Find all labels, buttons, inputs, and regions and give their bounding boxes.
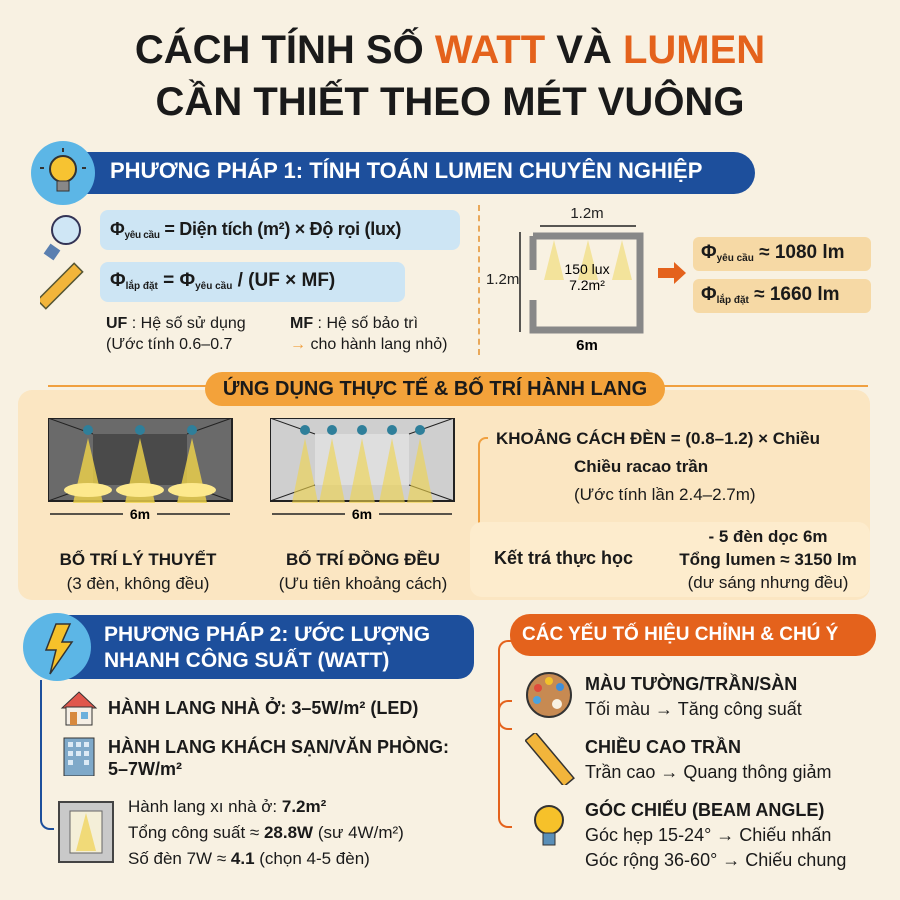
item: wall color: MÀU TƯỜNG/TRẦN/SÀN bbox=[585, 674, 797, 694]
item: beam angle: GÓC CHIẾU (BEAM ANGLE) bbox=[585, 800, 824, 820]
UF note bbox=[106, 315, 246, 353]
title bbox=[135, 27, 765, 124]
diagram: 5 lamps: 6m bbox=[352, 506, 372, 522]
banner: method 2 bbox=[23, 613, 474, 681]
heading pill: ỨNG DỤNG THỰC TẾ & BỐ TRÍ HÀNH LANG bbox=[223, 378, 647, 400]
heading pill bbox=[205, 372, 665, 406]
MF note: → cho hành lang nhỏ) bbox=[290, 336, 447, 353]
diagram: room plan bbox=[486, 205, 644, 354]
banner: method 2: NHANH CÔNG SUẤT (WATT) bbox=[104, 649, 389, 672]
diagram: 5 lamps bbox=[270, 418, 455, 522]
arrow bbox=[658, 262, 686, 284]
title: CÁCH TÍNH SỐ WATT VÀ LUMEN bbox=[135, 28, 765, 72]
formula 2 bbox=[100, 262, 405, 302]
MF note bbox=[290, 315, 447, 353]
item: beam angle: Góc hẹp 15-24° → Chiếu nhấn bbox=[585, 825, 831, 845]
panel: application: (dư sáng nhưng đều) bbox=[688, 573, 848, 592]
result text: Kết trá thực học bbox=[494, 548, 633, 568]
panel: application: Tổng lumen ≈ 3150 lm bbox=[679, 550, 857, 569]
icon: glass bulb bbox=[44, 215, 81, 260]
item: example: Tổng công suất ≈ 28.8W (sư 4W/m²) bbox=[128, 823, 404, 842]
result 1 bbox=[693, 237, 871, 271]
caption 1: (3 đèn, không đều) bbox=[67, 574, 209, 593]
formula 1: Φyêu cầu = Diện tích (m²) × Độ rọi (lux) bbox=[110, 219, 401, 241]
formula 1 bbox=[100, 210, 460, 250]
item: hotel bbox=[64, 736, 449, 779]
MF note: MF : Hệ số bảo trì bbox=[290, 315, 418, 332]
spacing formula: Chiều racao trần bbox=[574, 457, 708, 476]
item: beam angle bbox=[534, 799, 846, 870]
UF note: UF : Hệ số sử dụng bbox=[106, 315, 246, 332]
banner: adjustments: CÁC YẾU TỐ HIỆU CHỈNH & CHÚ Ý bbox=[522, 624, 838, 645]
item: home bbox=[60, 692, 418, 726]
item: wall color: Tối màu → Tăng công suất bbox=[585, 699, 802, 719]
item: ceiling height: Trần cao → Quang thông giảm bbox=[585, 762, 831, 782]
icon: bulb bbox=[31, 141, 95, 205]
icon: lightning bbox=[23, 613, 91, 681]
banner: method 2: PHƯƠNG PHÁP 2: ƯỚC LƯỢNG bbox=[104, 623, 430, 646]
diagram: room plan: 1.2m bbox=[486, 271, 519, 288]
diagram: room plan: 150 lux bbox=[564, 261, 610, 277]
item: ceiling height: CHIỀU CAO TRẦN bbox=[585, 737, 741, 757]
result 2: Φlắp đặt ≈ 1660 lm bbox=[701, 284, 840, 306]
caption 2 bbox=[279, 550, 447, 593]
result 2 bbox=[693, 279, 871, 313]
banner: adjustments bbox=[510, 614, 876, 656]
spacing formula: KHOẢNG CÁCH ĐÈN = (0.8–1.2) × Chiều bbox=[496, 429, 820, 448]
item: example: Hành lang xı nhà ở: 7.2m² bbox=[128, 797, 326, 816]
item: ceiling height bbox=[525, 733, 831, 785]
item: wall color bbox=[526, 672, 802, 719]
panel: application bbox=[18, 372, 870, 600]
item: hotel: 5–7W/m² bbox=[108, 759, 182, 779]
caption 1: BỐ TRÍ LÝ THUYẾT bbox=[60, 550, 216, 569]
diagram: room plan: 7.2m² bbox=[569, 277, 605, 293]
formula 2: Φlắp đặt = Φyêu cầu / (UF × MF) bbox=[110, 270, 335, 292]
icon: ruler bbox=[40, 262, 84, 310]
item: beam angle: Góc rộng 36-60° → Chiếu chung bbox=[585, 850, 846, 870]
caption 2: (Ưu tiên khoảng cách) bbox=[279, 574, 447, 593]
result 1: Φyêu cầu ≈ 1080 lm bbox=[701, 242, 845, 264]
diagram: room plan: 1.2m bbox=[570, 205, 604, 222]
item: home: HÀNH LANG NHÀ Ở: 3–5W/m² (LED) bbox=[108, 698, 418, 718]
spacing formula bbox=[496, 429, 820, 504]
title: CẦN THIẾT THEO MÉT VUÔNG bbox=[156, 80, 744, 124]
diagram: room plan: 6m bbox=[576, 337, 598, 354]
banner: method 1: PHƯƠNG PHÁP 1: TÍNH TOÁN LUMEN CHUYÊN NGHIỆP bbox=[110, 158, 702, 183]
diagram: 3 lamps bbox=[48, 418, 233, 522]
item: example bbox=[58, 797, 404, 868]
caption 1 bbox=[60, 550, 216, 593]
UF note: (Ước tính 0.6–0.7 bbox=[106, 336, 232, 353]
diagram: 3 lamps: 6m bbox=[130, 506, 150, 522]
banner: method 1 bbox=[31, 141, 755, 205]
item: example: Số đèn 7W ≈ 4.1 (chọn 4-5 đèn) bbox=[128, 849, 370, 868]
spacing formula: (Ước tính lần 2.4–2.7m) bbox=[574, 485, 756, 504]
panel: application: - 5 đèn dọc 6m bbox=[708, 527, 828, 546]
item: hotel: HÀNH LANG KHÁCH SẠN/VĂN PHÒNG: bbox=[108, 737, 449, 757]
caption 2: BỐ TRÍ ĐỒNG ĐỀU bbox=[286, 550, 440, 569]
